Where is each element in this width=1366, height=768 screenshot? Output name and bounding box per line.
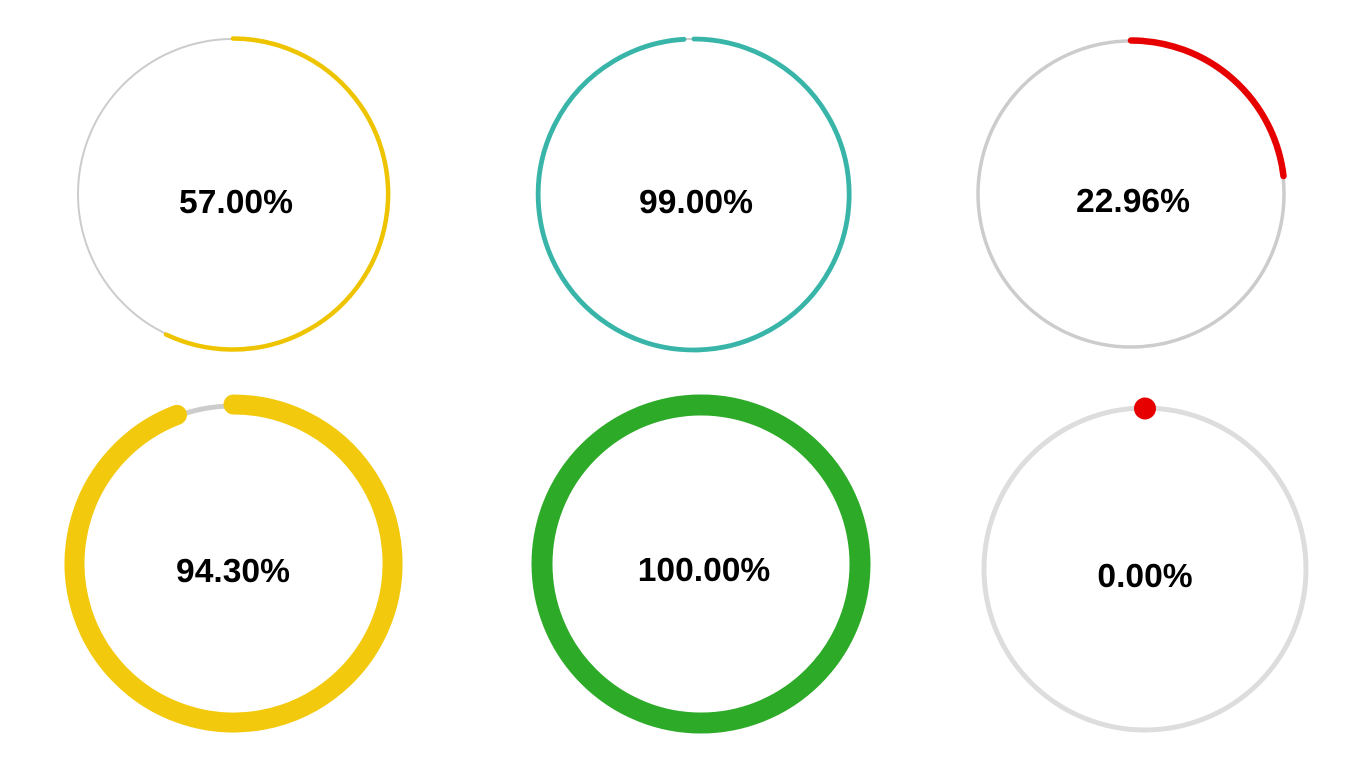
gauge: 100.00% [542, 405, 860, 723]
gauge: 99.00% [538, 39, 849, 350]
gauge: 99.00%: 99.00% [639, 184, 753, 221]
gauge: 0.00%: 0.00% [1097, 558, 1193, 595]
gauge: 57.00%: 57.00% [179, 184, 293, 221]
gauge: 22.96%: 22.96% [1076, 183, 1190, 220]
gauge: 94.30%: 94.30% [176, 553, 290, 590]
gauge: 0.00% [984, 398, 1306, 730]
gauge: 94.30% [75, 404, 393, 722]
gauge: 57.00% [78, 38, 388, 349]
gauge: 100.00%: 100.00% [638, 552, 770, 589]
gauge: 22.96% [978, 40, 1284, 347]
